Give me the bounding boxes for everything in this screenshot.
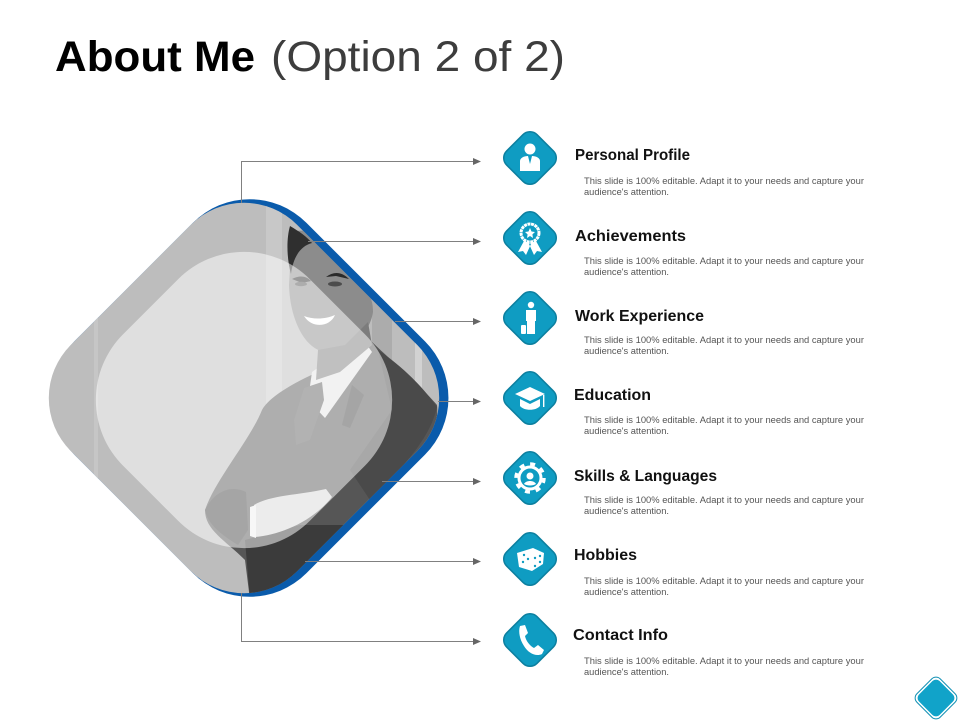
connector: hobbies <box>305 558 481 565</box>
corner decorative diamond <box>913 675 959 720</box>
description: audience's attention. <box>584 346 669 356</box>
connector: achievements <box>308 238 481 245</box>
title: (Option 2 of 2) <box>271 33 565 81</box>
blue backing diamond <box>18 166 482 630</box>
connector: work experience <box>395 318 481 325</box>
item: skills and languages <box>500 448 864 516</box>
description: This slide is 100% editable. Adapt it to your needs and capture your <box>584 335 864 345</box>
icon: phone handset <box>500 610 560 670</box>
item: contact info <box>500 610 864 677</box>
description: This slide is 100% editable. Adapt it to your needs and capture your <box>584 176 864 186</box>
item: work experience <box>500 288 864 356</box>
item: education <box>500 368 864 436</box>
description: audience's attention. <box>584 667 669 677</box>
heading: Education <box>574 387 651 404</box>
connector lines <box>242 158 481 645</box>
description: This slide is 100% editable. Adapt it to your needs and capture your <box>584 495 864 505</box>
description: audience's attention. <box>584 506 669 516</box>
description: audience's attention. <box>584 187 669 197</box>
heading: Hobbies <box>574 547 637 564</box>
icon: graduation cap <box>500 368 560 428</box>
item: personal profile <box>500 128 864 197</box>
description: audience's attention. <box>584 587 669 597</box>
connector: contact info <box>242 593 481 645</box>
portrait photo in diamond <box>48 202 440 594</box>
item: hobbies <box>500 529 864 597</box>
description: audience's attention. <box>584 426 669 436</box>
connector: education <box>438 398 481 405</box>
heading: Skills & Languages <box>574 468 717 485</box>
icon: standing person with case <box>500 288 560 348</box>
icon: dice <box>500 529 560 589</box>
description: This slide is 100% editable. Adapt it to your needs and capture your <box>584 415 864 425</box>
description: audience's attention. <box>584 267 669 277</box>
icon: award rosette <box>500 208 560 268</box>
description: This slide is 100% editable. Adapt it to your needs and capture your <box>584 656 864 666</box>
heading: Contact Info <box>573 627 668 644</box>
item: achievements <box>500 208 864 277</box>
translucent inner diamond overlay <box>57 213 431 587</box>
heading: Personal Profile <box>575 147 690 164</box>
description: This slide is 100% editable. Adapt it to your needs and capture your <box>584 256 864 266</box>
heading: Achievements <box>575 228 686 245</box>
title: About Me <box>55 33 255 81</box>
connector: personal profile <box>242 158 481 203</box>
icon: person with tie <box>500 128 560 188</box>
icon: gear with person <box>500 448 560 508</box>
heading: Work Experience <box>575 308 704 325</box>
description: This slide is 100% editable. Adapt it to your needs and capture your <box>584 576 864 586</box>
connector: skills and languages <box>382 478 481 485</box>
